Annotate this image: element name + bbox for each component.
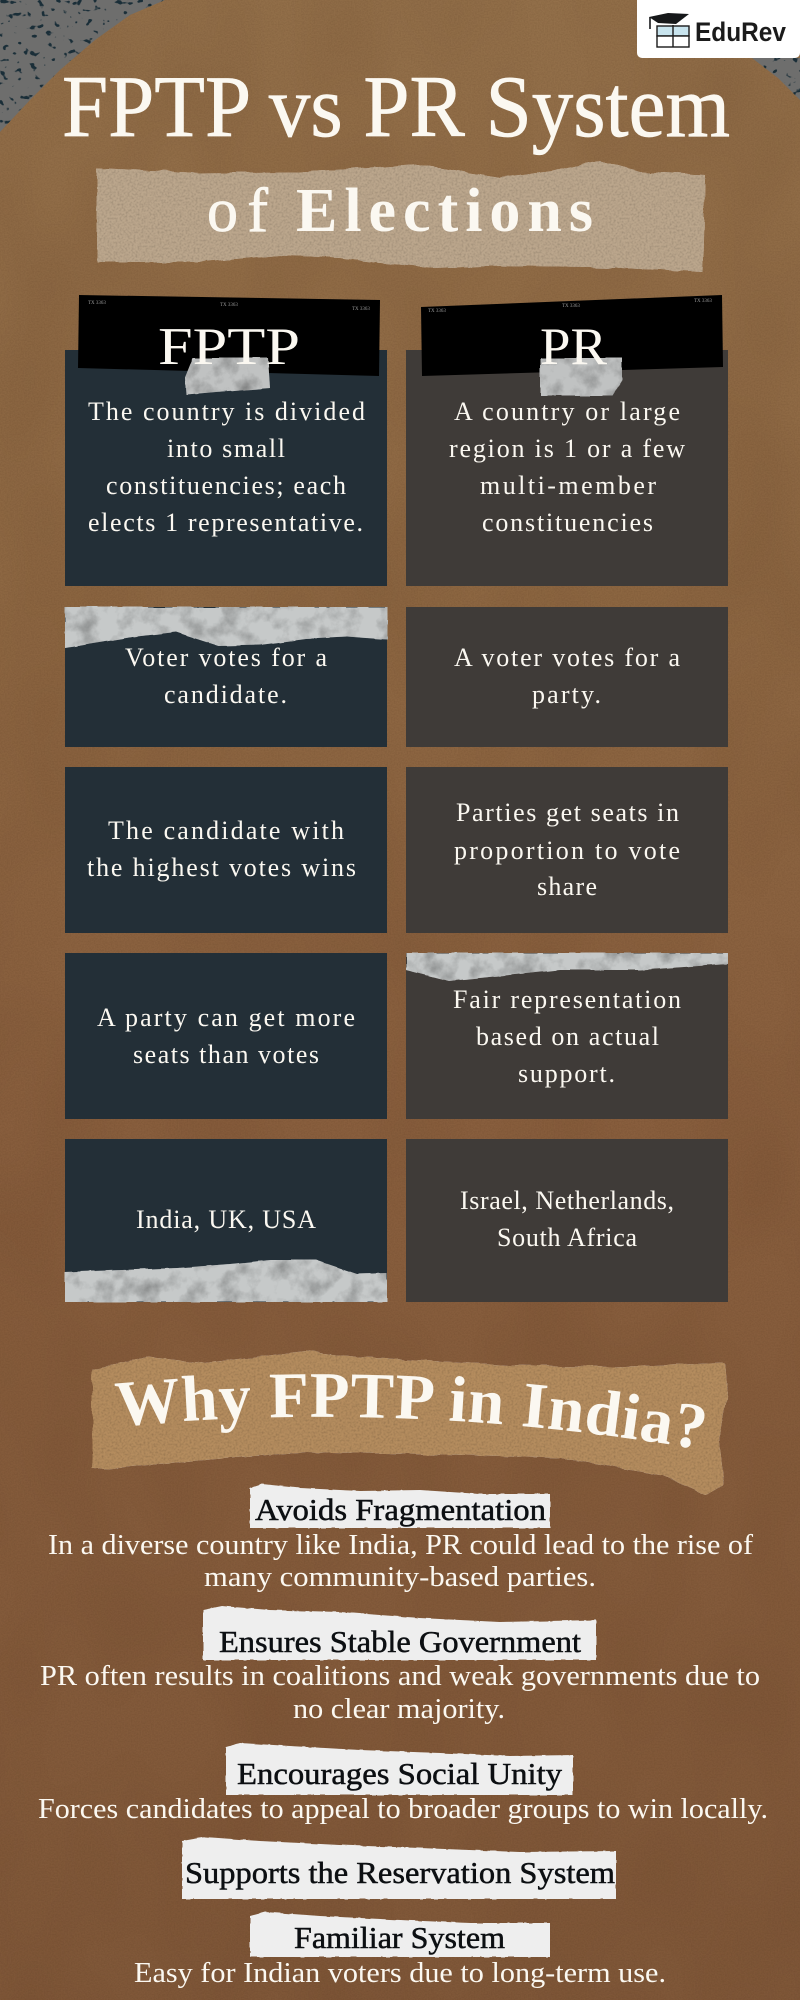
strip marks: TX 3363: [220, 303, 238, 308]
PR row 1 text: region is 1 or a few: [449, 434, 685, 463]
PR row 3 text: share: [537, 872, 597, 901]
PR row 1 text: A country or large: [454, 397, 680, 426]
icon: graduation cap and book: [649, 13, 689, 47]
description: no clear majority.: [293, 1693, 505, 1725]
Elections: Elections: [296, 177, 593, 245]
title: FPTP vs PR System: [62, 59, 730, 156]
FPTP row 3 text: The candidate with: [108, 816, 344, 845]
FPTP row 1 text: elects 1 representative.: [88, 508, 363, 537]
torn paper top: [406, 953, 728, 981]
torn paper behind section heading: [92, 1351, 727, 1495]
label strip: [203, 1606, 596, 1660]
FPTP heading: FPTP: [158, 318, 300, 376]
panel: FPTP row 5: [65, 1139, 387, 1302]
PR row 2 text: party.: [532, 680, 601, 709]
subtitle: [207, 177, 593, 245]
FPTP row 4 text: A party can get more: [97, 1003, 355, 1032]
description: many community-based parties.: [204, 1561, 596, 1593]
reason: Familiar System: [134, 1912, 666, 1989]
label text: Supports the Reservation System: [185, 1855, 615, 1890]
FPTP row 1 text: constituencies; each: [106, 471, 346, 500]
torn paper top: [65, 607, 387, 648]
label text: Ensures Stable Government: [219, 1624, 581, 1659]
PR row 4 text: based on actual: [476, 1022, 659, 1051]
reason: Avoids Fragmentation: [48, 1484, 753, 1593]
panel: FPTP row 2: [65, 607, 387, 747]
PR row 5 text: South Africa: [497, 1223, 637, 1252]
strip marks: TX 3363: [562, 304, 580, 309]
panel: FPTP row 1: [65, 295, 387, 586]
FPTP row 4 text: [97, 1003, 355, 1069]
FPTP row 5 text: India, UK, USA: [136, 1205, 316, 1234]
PR row 5 text: Israel, Netherlands,: [460, 1186, 674, 1215]
panel: PR row 3: [406, 767, 728, 933]
PR row 4 text: support.: [518, 1059, 615, 1088]
tape: [185, 358, 270, 395]
strip marks: TX 3363: [428, 309, 446, 314]
tape: [540, 358, 622, 396]
PR row 4 text: Fair representation: [453, 985, 681, 1014]
label strip: [182, 1837, 616, 1899]
FPTP row 4 text: seats than votes: [133, 1040, 319, 1069]
description: [40, 1660, 760, 1725]
strip marks: TX 3363: [352, 307, 370, 312]
PR row 3 text: [454, 798, 680, 901]
PR row 1 text: [449, 397, 685, 537]
FPTP row 2 text: Voter votes for a: [125, 643, 327, 672]
FPTP black header strip: [78, 295, 380, 376]
PR row 1 text: constituencies: [482, 508, 653, 537]
description: Forces candidates to appeal to broader groups to win locally.: [38, 1793, 768, 1825]
label text: Familiar System: [294, 1920, 505, 1955]
PR row 1 text: multi-member: [480, 471, 656, 500]
label strip: [250, 1484, 550, 1528]
reason: Encourages Social Unity: [38, 1743, 768, 1825]
strip marks: TX 3363: [694, 299, 712, 304]
top-left speckled corner: [0, 0, 170, 135]
logo wordmark: EduRev: [695, 17, 786, 47]
top-right speckled corner: [750, 58, 800, 102]
description: PR often results in coalitions and weak governments due to: [40, 1660, 760, 1692]
PR row 4 text: [453, 985, 681, 1088]
strip marks: TX 3363: [88, 301, 106, 306]
label strip: [250, 1912, 550, 1957]
EduRev logo: [637, 0, 800, 58]
PR row 5 text: [460, 1186, 674, 1252]
description: In a diverse country like India, PR could lead to the rise of: [48, 1529, 753, 1561]
panel: FPTP row 4: [65, 953, 387, 1119]
section heading: Why FPTP in India?: [114, 1374, 704, 1448]
FPTP row 3 text: [87, 816, 356, 882]
of: of: [207, 177, 268, 245]
reason: Supports the Reservation System: [182, 1837, 616, 1899]
FPTP row 1 text: [88, 397, 365, 537]
torn paper bottom: [65, 1260, 387, 1302]
FPTP row 1 text: into small: [167, 434, 285, 463]
label strip: [226, 1743, 573, 1795]
PR row 3 text: proportion to vote: [454, 836, 680, 865]
PR black header strip: [421, 295, 723, 376]
PR row 3 text: Parties get seats in: [456, 798, 679, 827]
description: [48, 1529, 753, 1593]
PR row 2 text: A voter votes for a: [454, 643, 680, 672]
label text: Encourages Social Unity: [237, 1756, 563, 1791]
FPTP row 2 text: [125, 643, 327, 709]
FPTP row 1 text: The country is divided: [88, 397, 365, 426]
FPTP row 3 text: the highest votes wins: [87, 853, 356, 882]
panel: PR row 2: [406, 607, 728, 747]
panel: PR row 4: [406, 953, 728, 1119]
description: Easy for Indian voters due to long-term use.: [134, 1957, 666, 1989]
panel: PR row 1: [406, 295, 728, 586]
panel: PR row 5: [406, 1139, 728, 1302]
panel: FPTP row 3: [65, 767, 387, 933]
label text: Avoids Fragmentation: [255, 1492, 547, 1527]
PR heading: PR: [540, 318, 608, 376]
PR row 2 text: [454, 643, 680, 709]
FPTP row 2 text: candidate.: [164, 680, 287, 709]
reason: Ensures Stable Government: [40, 1606, 760, 1725]
torn paper strip behind subtitle: [97, 161, 705, 272]
